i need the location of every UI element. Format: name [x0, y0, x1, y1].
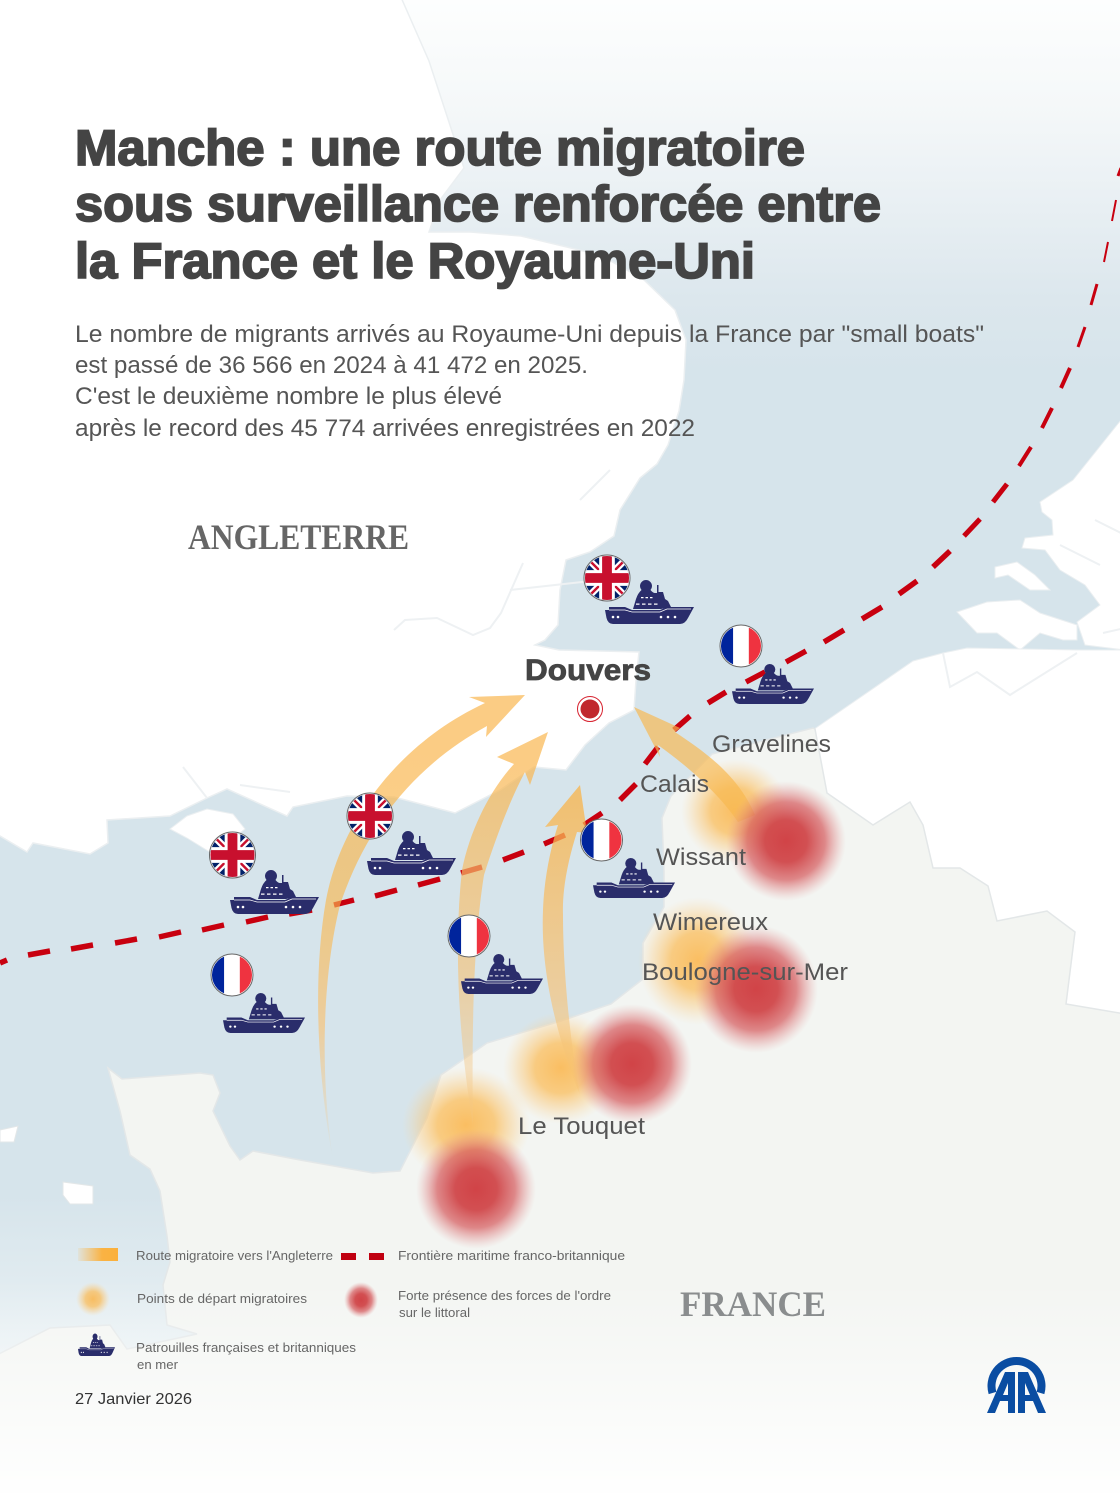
title: Manche : une route migratoire — [75, 120, 805, 176]
legend: border swatch — [341, 1253, 384, 1260]
legend: route label: Route migratoire vers l'Angleterre — [136, 1248, 333, 1263]
town labels: Calais — [640, 771, 709, 798]
patrol: France west — [211, 954, 305, 1033]
title: la France et le Royaume-Uni — [75, 233, 755, 289]
title — [75, 120, 881, 289]
legend: departure swatch — [76, 1282, 110, 1316]
legend: police label — [398, 1288, 611, 1320]
label: Dover: Douvers — [525, 654, 651, 687]
arrow: route 1 — [318, 695, 525, 1160]
heat spot: Somme police presence — [416, 1129, 536, 1249]
town labels: Le Touquet — [518, 1113, 645, 1140]
patrol: France near Wissant — [580, 819, 675, 898]
legend: route swatch — [78, 1248, 118, 1261]
intro text: Le nombre de migrants arrivés au Royaume-Uni depuis la France par "small boats" — [75, 321, 984, 348]
legend: border label: Frontière maritime franco-britannique — [398, 1248, 625, 1263]
maritime border: dashed red line — [0, 168, 1120, 963]
land: Zeeland island — [957, 600, 1077, 650]
bottom fade — [0, 1280, 1120, 1493]
heat spot: Wissant departure point — [681, 759, 789, 863]
patrol: France centre — [448, 915, 543, 994]
label: France: FRANCE — [680, 1284, 826, 1324]
legend: patrol label — [136, 1340, 357, 1372]
heat spot: Wimereux departure point — [638, 897, 758, 1025]
legend: police label: Forte présence des forces de l'ordre — [398, 1288, 611, 1303]
heat spot: Boulogne police presence — [694, 925, 818, 1053]
intro text: après le record des 45 774 arrivées enregistrées en 2022 — [75, 415, 695, 442]
arrow: route 4 — [634, 707, 755, 822]
islands: Channel Islands — [0, 1126, 93, 1204]
land: Schouwen island — [995, 562, 1050, 590]
patrol: UK near Wight — [209, 832, 319, 914]
arrow: route 3 — [543, 785, 587, 1095]
legend — [76, 1248, 625, 1372]
land: Belgium — [810, 648, 1120, 1020]
legend: patrol label: Patrouilles françaises et britanniques — [136, 1340, 357, 1355]
town labels: Boulogne-sur-Mer — [642, 959, 848, 986]
legend: police label: sur le littoral — [399, 1305, 470, 1320]
town labels: Gravelines — [712, 731, 831, 758]
label: England: ANGLETERRE — [188, 517, 409, 557]
coast details — [183, 470, 1120, 798]
land: France — [0, 728, 1120, 1493]
logo: AA — [987, 1361, 1046, 1413]
intro text: est passé de 36 566 en 2024 à 41 472 en 2025. — [75, 352, 588, 379]
heat spot: Le Touquet departure point — [503, 1012, 619, 1124]
patrol: France near Gravelines — [720, 625, 814, 704]
patrol: UK mid channel — [346, 792, 456, 875]
intro text: C'est le deuxième nombre le plus élevé — [75, 383, 502, 410]
land: England — [0, 0, 686, 854]
land: Isle of Wight — [170, 809, 245, 854]
town labels: Wimereux — [653, 909, 768, 936]
legend: patrol label: en mer — [137, 1357, 179, 1372]
town labels: Wissant — [656, 844, 746, 871]
town labels — [518, 731, 848, 1140]
title: sous surveillance renforcée entre — [75, 176, 881, 232]
heat spot: Somme departure point — [402, 1067, 530, 1183]
legend: departure label: Points de départ migratoires — [137, 1291, 308, 1306]
land: Netherlands coast — [1022, 415, 1120, 650]
heat spot: Le Touquet police presence — [572, 1004, 692, 1124]
arrow: route 2 — [458, 732, 548, 1125]
legend: ship icon — [78, 1334, 115, 1356]
patrol: UK north of Dover — [584, 554, 694, 624]
heat spot: Wissant police presence — [726, 781, 846, 901]
intro text — [75, 321, 984, 442]
Dover marker — [578, 696, 602, 722]
date: 27 Janvier 2026 — [75, 1391, 192, 1408]
legend: police swatch — [344, 1282, 378, 1318]
